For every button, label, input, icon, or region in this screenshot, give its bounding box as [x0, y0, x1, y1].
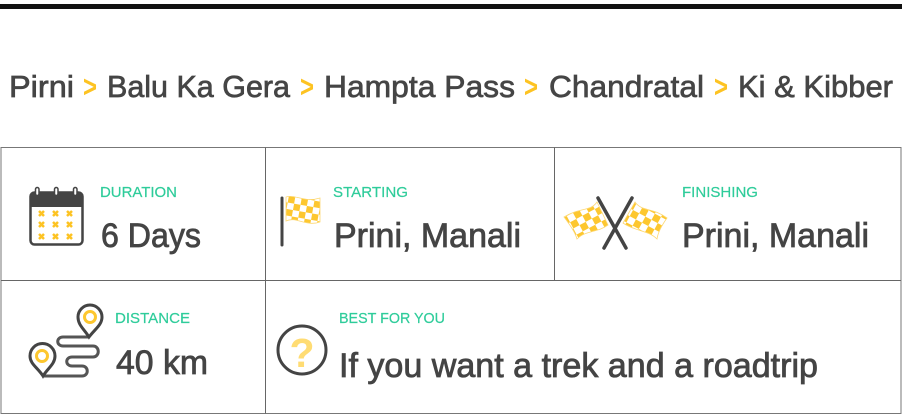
panel: distance — [30, 305, 208, 382]
panel: finishing: FINISHING — [682, 184, 758, 201]
icon: calendar — [30, 188, 83, 244]
route heading: Pirni — [9, 69, 74, 104]
panel: duration — [30, 184, 201, 255]
icon: crossed checkered flags — [564, 198, 667, 248]
panel: best for you — [278, 310, 818, 385]
icon: question mark: ? — [289, 330, 315, 376]
route heading: Chandratal — [549, 69, 704, 104]
panel: duration: 6 Days — [101, 217, 201, 255]
panel: best for you: If you want a trek and a roadtrip — [339, 347, 818, 385]
route heading — [9, 69, 893, 104]
top bar — [0, 4, 902, 9]
route heading: > — [714, 69, 728, 104]
route heading: > — [524, 69, 538, 104]
panel: starting: Prini, Manali — [334, 217, 521, 255]
icon: question mark — [278, 326, 326, 376]
panel: finishing — [564, 184, 869, 255]
panel: duration: DURATION — [100, 184, 177, 201]
panel: best for you: BEST FOR YOU — [339, 310, 445, 327]
panel: starting — [282, 184, 521, 255]
icon: route with map pins — [30, 305, 102, 376]
panel: distance: 40 km — [116, 344, 208, 382]
route heading: Balu Ka Gera — [107, 69, 291, 104]
panel: distance: DISTANCE — [115, 310, 190, 327]
panel: finishing: Prini, Manali — [682, 217, 869, 255]
route heading: > — [300, 69, 314, 104]
panel: starting: STARTING — [333, 184, 408, 201]
route heading: Hampta Pass — [324, 69, 515, 104]
route heading: Ki & Kibber — [738, 69, 893, 104]
route heading: > — [83, 69, 97, 104]
table grid — [1, 148, 901, 414]
icon: checkered flag — [282, 196, 320, 245]
